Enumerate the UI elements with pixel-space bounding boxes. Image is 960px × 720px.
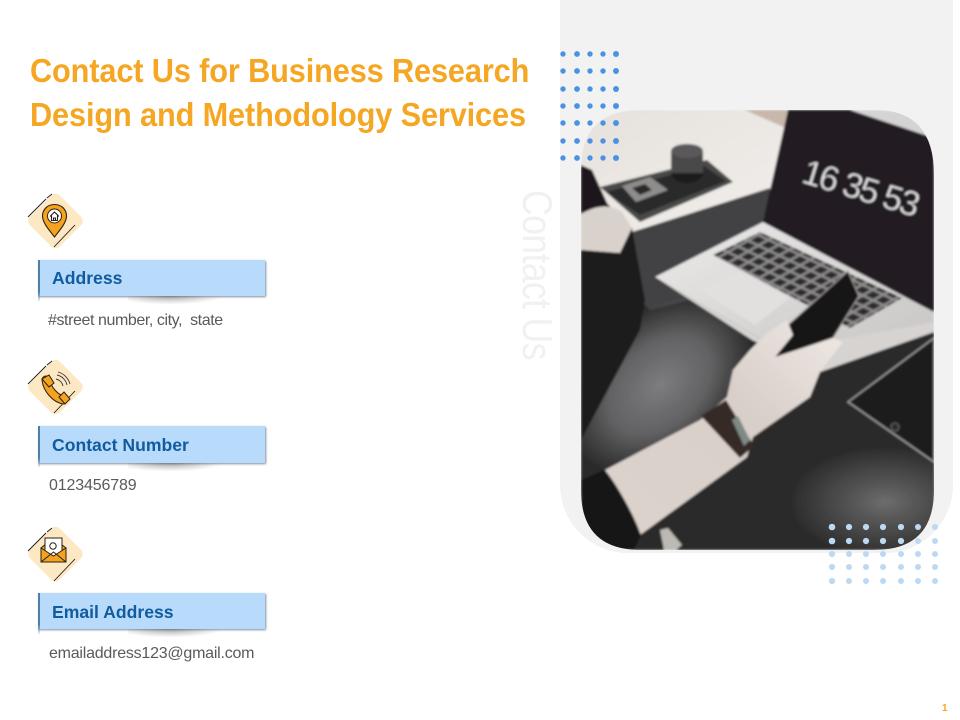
icon: envelope with at sign [28, 526, 83, 582]
forearm and hand [605, 320, 843, 535]
upper mat tone [632, 188, 770, 310]
bar shadow [128, 296, 220, 304]
bracelet [701, 400, 754, 458]
tray and speaker [600, 160, 733, 222]
heading: Contact Number: Contact Number [52, 435, 189, 455]
bar accent edge [38, 593, 40, 635]
clock on screen: 16 35 53 [798, 152, 923, 225]
title: Contact Us for Business Research [30, 53, 529, 90]
desk surface [581, 188, 934, 550]
bar: email address label [38, 593, 265, 629]
dot grid: bottom pale blue [828, 524, 938, 584]
bar shadow [128, 629, 220, 637]
heading: Address: Address [52, 268, 122, 288]
phone [775, 271, 859, 358]
tablet [848, 338, 934, 462]
icon: home location pin [28, 194, 83, 248]
bar shadow [128, 463, 220, 471]
title [30, 53, 529, 134]
title: Design and Methodology Services [30, 97, 526, 134]
heading: Email Address: Email Address [52, 602, 174, 622]
bar accent edge [38, 426, 40, 468]
laptop screen [763, 110, 934, 312]
bar: contact number label [38, 426, 265, 463]
watch and left arm [581, 164, 608, 212]
page number: 1 [942, 703, 948, 714]
sleeve [581, 470, 641, 550]
bar: address label [38, 260, 265, 296]
icon: phone with signal [28, 360, 83, 414]
vertical watermark text: Contact Us: Contact Us [514, 190, 561, 360]
bar accent edge [38, 260, 40, 302]
dot grid: top blue [560, 51, 619, 161]
contact item: email address [28, 526, 268, 662]
text: email: emailaddress123@gmail.com [49, 645, 254, 662]
panel: grey background behind photo [560, 0, 953, 553]
keyboard [713, 232, 902, 328]
text: phone number: 0123456789 [49, 477, 136, 494]
object at bottom edge [660, 528, 682, 550]
photo: laptop and phone on desk [581, 110, 934, 550]
laptop base [654, 220, 934, 341]
text: street address: #street number, city, state [48, 312, 223, 329]
contact item: contact number [28, 360, 268, 494]
grey mat highlights [534, 261, 960, 557]
contact item: address [28, 194, 268, 329]
